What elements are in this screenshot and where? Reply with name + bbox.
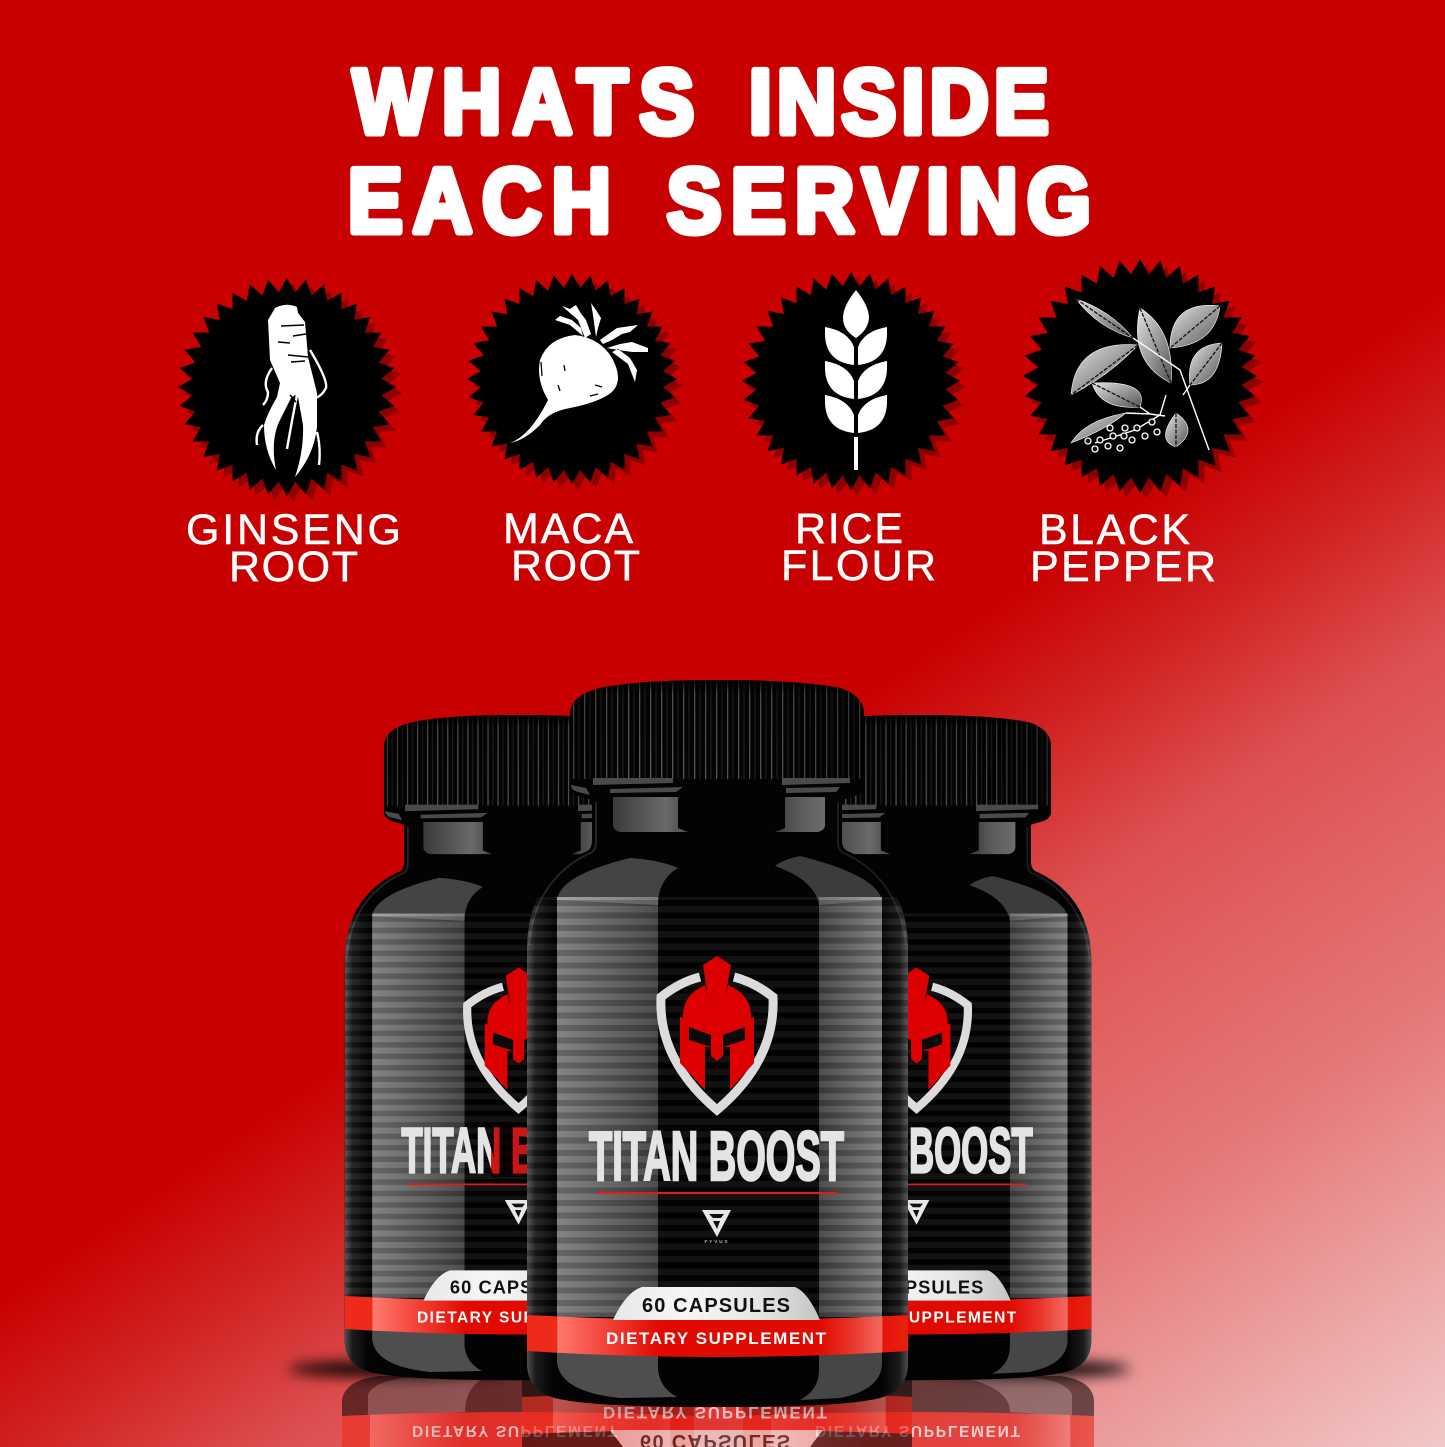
bottle label text: right: TITAN BOOST xyxy=(799,1115,1033,1187)
label: rice flour: FLOUR xyxy=(781,542,936,590)
ingredient: ginseng root xyxy=(178,278,402,591)
label: rice flour xyxy=(781,505,936,590)
label: black pepper xyxy=(1030,506,1216,591)
reflection: right bottle: DIETARY SUPPLEMENT xyxy=(815,1422,1021,1439)
reflection: center bottle: DIETARY SUPPLEMENT xyxy=(603,1403,828,1422)
bottle: left xyxy=(345,715,693,1380)
label: rice flour: RICE xyxy=(795,505,903,553)
title: WHATS xyxy=(353,52,694,153)
bottle label text: center: 60 CAPSULES xyxy=(642,1295,790,1317)
reflection: left bottle: DIETARY SUPPLEMENT xyxy=(412,1422,618,1439)
label: ginseng root: ROOT xyxy=(229,543,358,591)
bottle: center xyxy=(527,680,908,1407)
bottle label text: center xyxy=(589,1117,844,1348)
bottle label text: left: TITAN BOOST xyxy=(401,1115,635,1187)
reflection: right bottle xyxy=(743,1375,1094,1447)
icon: maca badge xyxy=(467,274,683,490)
bottle label text: center: FYVUS xyxy=(704,1239,730,1244)
bottle label text: left: 60 CAPSULES xyxy=(450,1276,585,1297)
label: ginseng root: GINSENG xyxy=(186,506,401,554)
bottle: right xyxy=(743,715,1091,1380)
bottle label text: right: 60 CAPSULES xyxy=(848,1276,983,1297)
label: ginseng root xyxy=(186,506,401,591)
bottle label text: center: TITAN BOOST xyxy=(589,1117,844,1195)
title: SERVING xyxy=(667,151,1091,252)
label: maca root xyxy=(503,505,640,590)
icon: pepper plant badge xyxy=(1023,259,1263,499)
label: black pepper: PEPPER xyxy=(1030,543,1216,591)
title xyxy=(348,52,1091,252)
reflection: left bottle xyxy=(342,1375,694,1447)
bottle label text: right: DIETARY SUPPLEMENT xyxy=(815,1310,1017,1327)
ingredient: rice flour xyxy=(742,272,966,590)
ingredient: black pepper xyxy=(1023,259,1263,591)
bottle label text: left xyxy=(401,1114,635,1327)
title: INSIDE xyxy=(749,52,1049,153)
icon: wheat badge xyxy=(742,272,966,496)
title: EACH xyxy=(348,151,611,252)
floor shadow xyxy=(288,1361,1130,1377)
reflection: center bottle xyxy=(522,1375,912,1447)
label: maca root: ROOT xyxy=(511,542,640,590)
bottle label text: left: DIETARY SUPPLEMENT xyxy=(417,1310,619,1327)
bottle label text: center: DIETARY SUPPLEMENT xyxy=(606,1329,827,1348)
icon: ginseng badge xyxy=(178,278,402,502)
bottle label text: right xyxy=(799,1114,1033,1327)
ingredient: maca root xyxy=(467,274,683,590)
label: maca root: MACA xyxy=(503,505,633,553)
label: black pepper: BLACK xyxy=(1039,506,1190,554)
